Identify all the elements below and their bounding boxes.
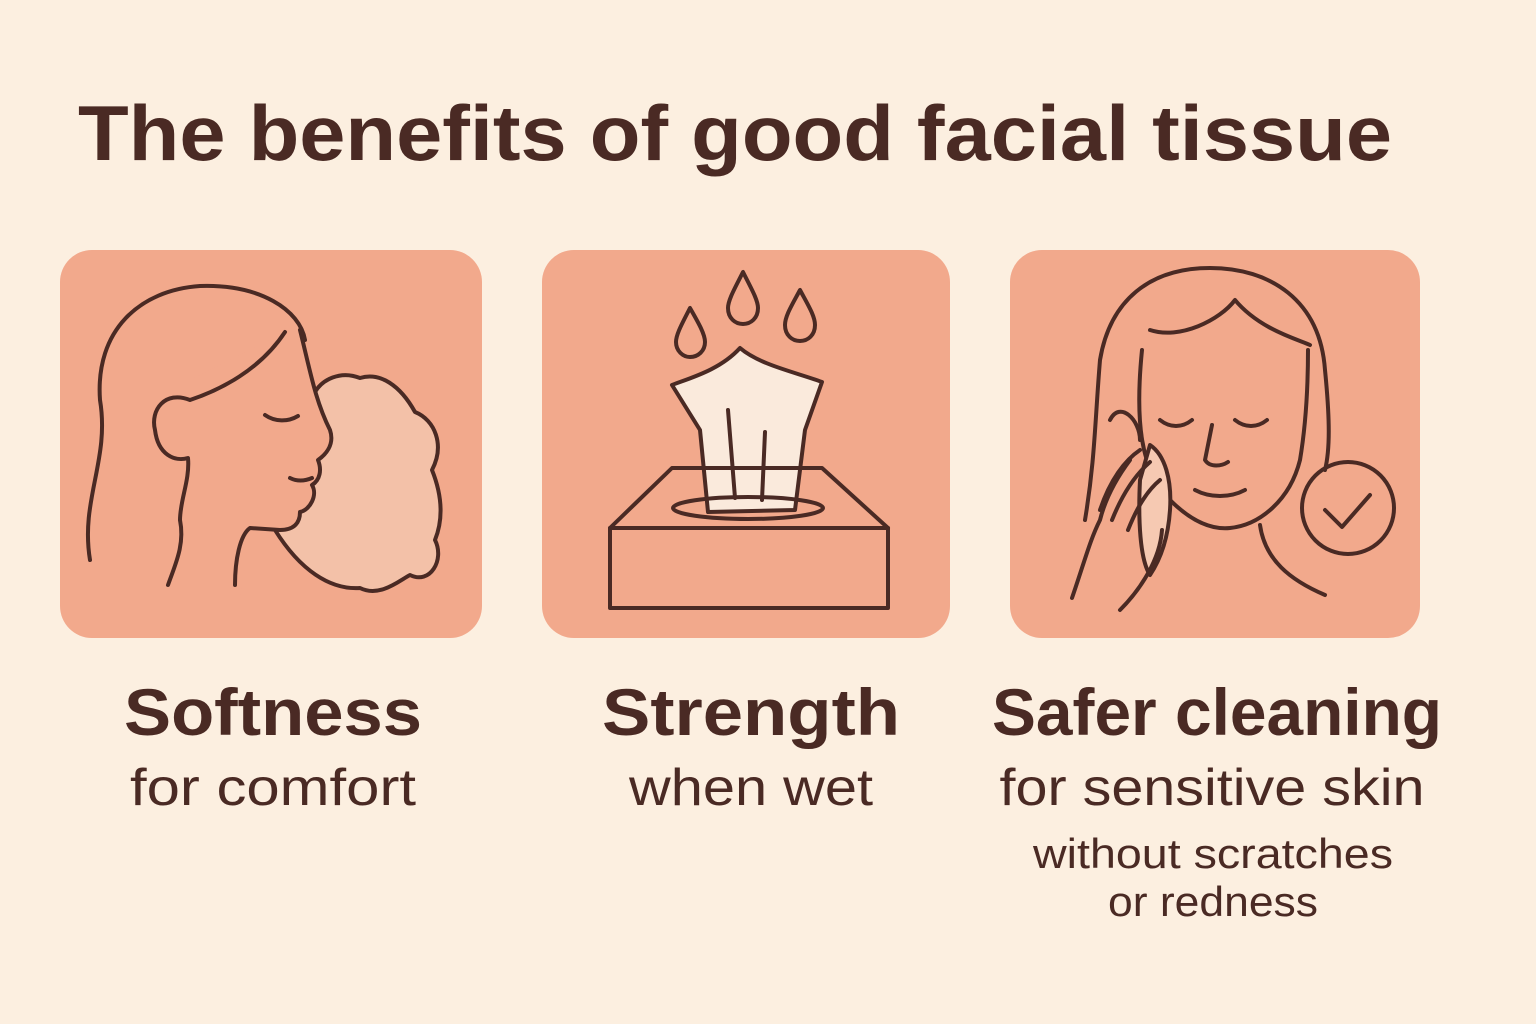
heading: safer cleaning: Safer cleaning bbox=[992, 675, 1442, 749]
icon: tissue box with water drops bbox=[610, 272, 888, 608]
heading: softness: Softness bbox=[124, 675, 422, 749]
heading: strength: Strength bbox=[602, 675, 900, 749]
panel: strength bbox=[542, 250, 950, 638]
icon: woman profile with soft cloud bbox=[88, 286, 441, 600]
text: when wet: when wet bbox=[628, 759, 874, 817]
text: without scratches or redness: or redness bbox=[1108, 878, 1318, 925]
text: for comfort: for comfort bbox=[130, 759, 417, 817]
text: without scratches or redness: without scratches bbox=[1032, 830, 1393, 877]
title: The benefits of good facial tissue bbox=[78, 89, 1392, 177]
icon: woman cleaning face with check bbox=[1072, 268, 1394, 610]
text: for sensitive skin: for sensitive skin bbox=[1000, 759, 1424, 817]
text: without scratches or redness bbox=[1032, 830, 1393, 925]
panel: safer cleaning bbox=[1010, 250, 1420, 638]
panel: softness bbox=[60, 250, 482, 638]
